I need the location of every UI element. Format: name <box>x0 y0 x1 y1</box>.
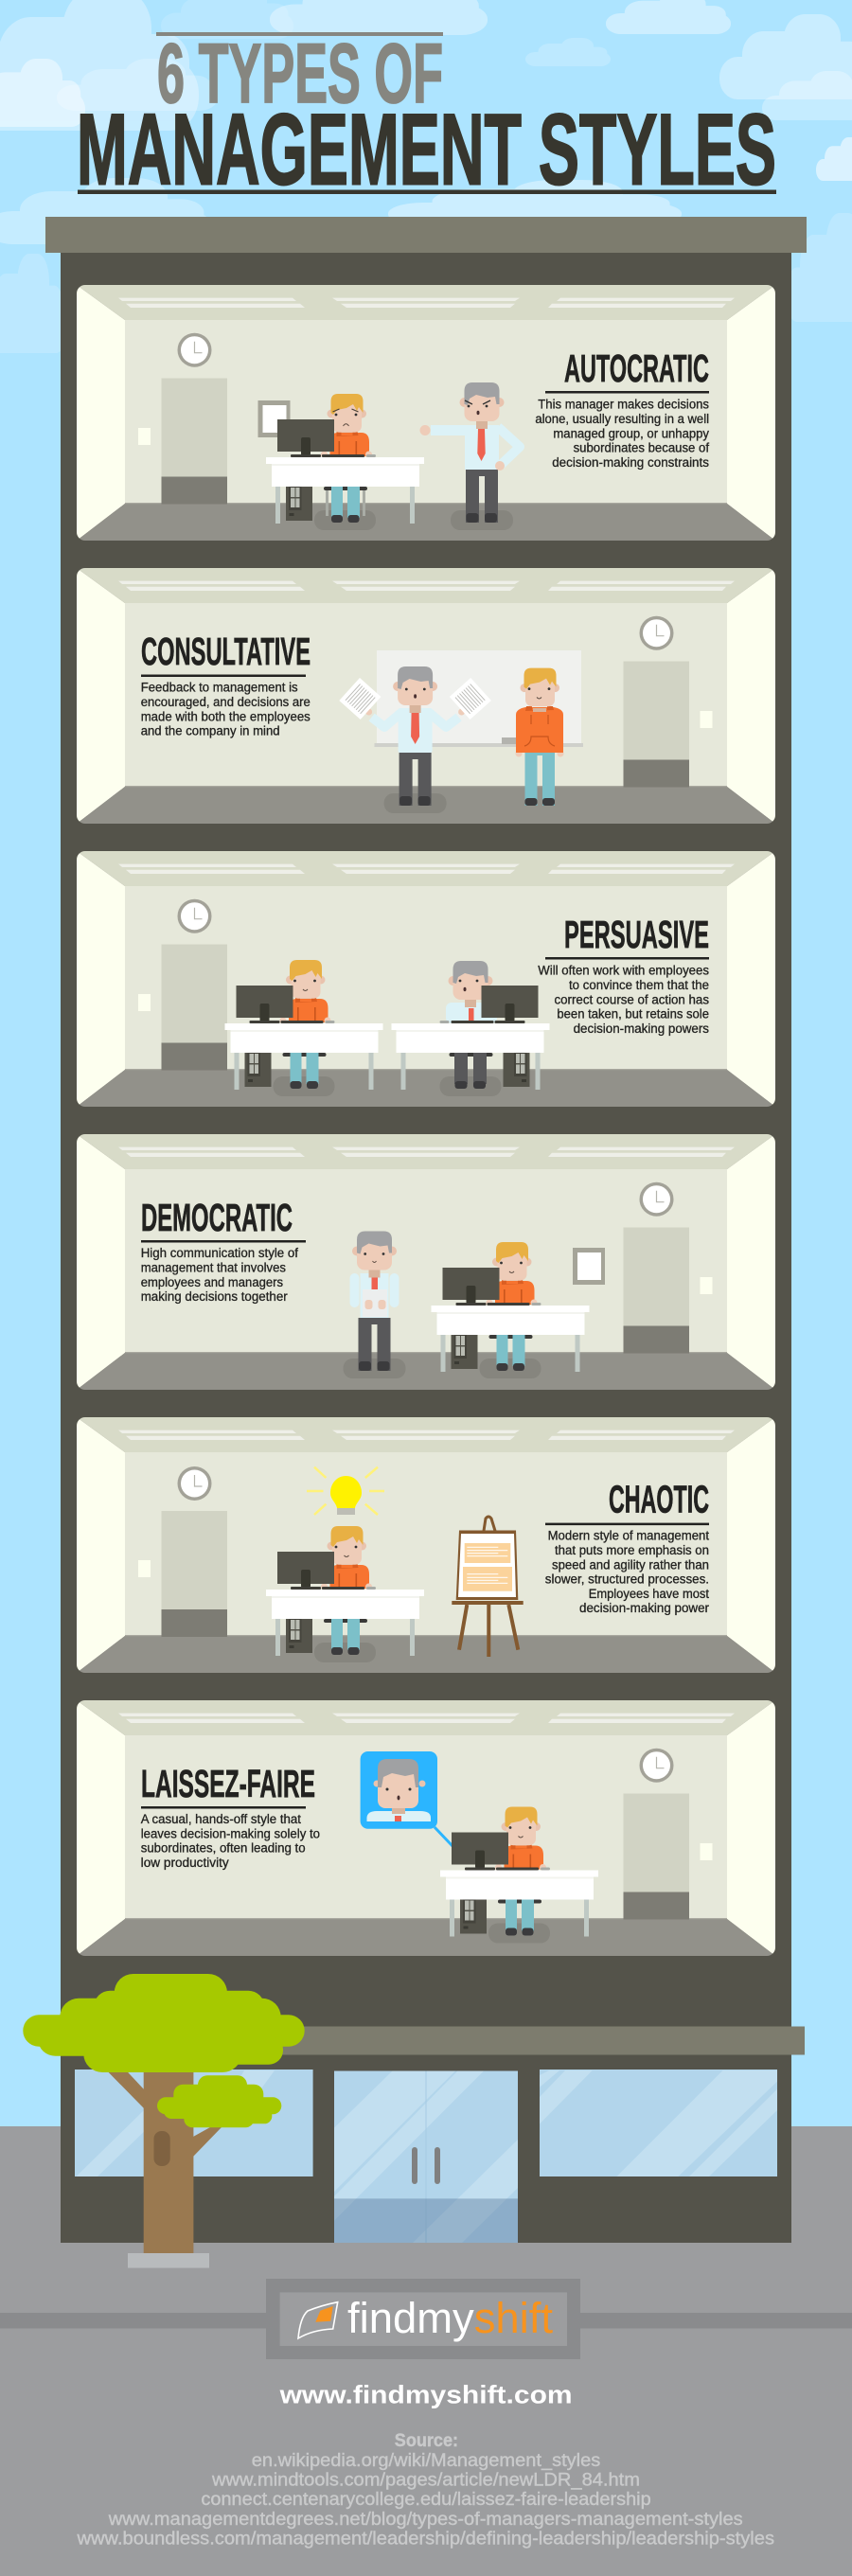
text: autocratic description: alone, usually resulting in a well <box>535 412 709 426</box>
clock <box>640 1749 674 1783</box>
clock <box>178 899 212 933</box>
whiteboard <box>375 650 583 747</box>
window: left <box>75 2070 313 2176</box>
heading: chaotic: CHAOTIC <box>609 1477 709 1520</box>
sources: www.managementdegrees.net/blog/types-of-managers-management-styles <box>108 2509 743 2530</box>
title <box>77 26 776 206</box>
road strip <box>0 2313 852 2329</box>
tree trunk <box>107 2064 222 2253</box>
panel: laissez-faire room <box>77 1700 775 1956</box>
sources: connect.centenarycollege.edu/laissez-faire-leadership <box>201 2489 651 2510</box>
logo box <box>266 2279 580 2359</box>
tree <box>23 1974 305 2268</box>
text: persuasive description: decision-making powers <box>574 1022 709 1036</box>
clock <box>640 616 674 650</box>
light switch <box>138 428 151 445</box>
heading: democratic: DEMOCRATIC <box>141 1196 293 1239</box>
panel: consultative room <box>77 568 775 824</box>
text: democratic description: High communication style of <box>141 1246 298 1260</box>
sources: en.wikipedia.org/wiki/Management_styles <box>252 2450 601 2471</box>
text: consultative description: Feedback to management is <box>141 681 298 695</box>
website url: www.findmyshift.com <box>278 2381 573 2409</box>
door handles <box>412 2147 417 2184</box>
manager at desk <box>392 961 549 1096</box>
clock <box>640 1182 674 1217</box>
text: persuasive description: correct course of action has <box>555 992 709 1006</box>
text: persuasive description: to convince them that the <box>569 978 709 992</box>
sources: Source: <box>395 2430 458 2451</box>
heading: laissez-faire: LAISSEZ-FAIRE <box>141 1762 315 1805</box>
heading: consultative: CONSULTATIVE <box>141 630 311 673</box>
panel: democratic room <box>77 1134 775 1390</box>
text: consultative description: and the company in mind <box>141 724 280 738</box>
text: consultative description <box>141 681 311 738</box>
text: chaotic description: Modern style of management <box>548 1529 709 1543</box>
employee at desk <box>432 1242 589 1378</box>
sources <box>76 2430 774 2549</box>
text: democratic description <box>141 1246 298 1304</box>
light switch <box>701 711 712 728</box>
panel: chaotic room <box>77 1417 775 1673</box>
heading: autocratic: AUTOCRATIC <box>564 346 709 390</box>
logo wordmark: findmyshift <box>347 2294 553 2342</box>
panel: autocratic room <box>77 285 775 541</box>
employee at desk <box>440 1806 598 1943</box>
paper left <box>339 678 381 720</box>
text: consultative description: made with both the employees <box>141 709 311 723</box>
sources: www.mindtools.com/pages/article/newLDR_84.htm <box>211 2469 640 2490</box>
employee standing <box>515 668 564 806</box>
title rule: bottom <box>78 189 776 194</box>
door <box>161 379 227 504</box>
heading rule: democratic <box>141 1240 306 1242</box>
text: chaotic description: Employees have most <box>589 1587 709 1601</box>
text: autocratic description: managed group, or unhappy <box>553 426 709 440</box>
manager pointing <box>420 382 520 530</box>
heading rule: laissez-faire <box>141 1806 306 1808</box>
window: right <box>540 2070 777 2176</box>
text: chaotic description: speed and agility rather than <box>552 1557 709 1572</box>
storefront awning <box>189 2026 805 2054</box>
text: democratic description: making decisions together <box>141 1289 288 1304</box>
door <box>161 945 227 1070</box>
heading rule: persuasive <box>545 957 709 960</box>
clock <box>178 333 212 367</box>
title rule: top <box>156 32 443 36</box>
speech bubble with manager portrait <box>361 1751 453 1846</box>
ground <box>0 2126 852 2576</box>
text: chaotic description: slower, structured processes. <box>545 1572 709 1587</box>
employee at desk <box>266 1526 424 1662</box>
text: laissez-faire description: subordinates, often leading to <box>141 1841 306 1856</box>
door <box>161 1511 227 1637</box>
text: laissez-faire description <box>141 1812 320 1870</box>
heading rule: autocratic <box>545 391 709 394</box>
heading rule: chaotic <box>545 1523 709 1525</box>
paper right <box>450 678 491 720</box>
text: chaotic description: decision-making power <box>579 1601 709 1615</box>
text: chaotic description: that puts more emphasis on <box>555 1543 709 1557</box>
text: persuasive description: Will often work with employees <box>538 964 709 978</box>
door <box>623 661 689 788</box>
heading: persuasive: PERSUASIVE <box>564 913 709 956</box>
text: autocratic description: This manager makes decisions <box>538 398 709 412</box>
text: persuasive description <box>538 964 709 1036</box>
light switch <box>138 994 151 1011</box>
text: laissez-faire description: leaves decision-making solely to <box>141 1826 320 1840</box>
text: autocratic description: decision-making constraints <box>552 455 709 470</box>
icon: light bulb <box>307 1467 384 1515</box>
panel: persuasive room <box>77 851 775 1107</box>
building roof <box>45 217 807 253</box>
manager with papers <box>339 666 491 813</box>
text: laissez-faire description: low productivity <box>141 1856 229 1870</box>
text: democratic description: management that involves <box>141 1261 286 1274</box>
title line 1: 6 TYPES OF <box>157 26 443 120</box>
door <box>623 1793 689 1920</box>
building wall <box>61 253 791 2243</box>
picture frame <box>257 400 290 437</box>
text: autocratic description: subordinates because of <box>574 441 709 455</box>
text: chaotic description <box>545 1529 709 1615</box>
sources: www.boundless.com/management/leadership/defining-leadership/leadership-styles <box>76 2528 774 2549</box>
light switch <box>701 1843 712 1860</box>
text: autocratic description <box>535 398 709 470</box>
text: laissez-faire description: A casual, hands-off style that <box>141 1812 301 1826</box>
employee at desk <box>225 960 382 1096</box>
picture frame <box>573 1248 605 1285</box>
tree base <box>128 2253 209 2268</box>
icon: logo page <box>298 2302 338 2338</box>
light switch <box>138 1560 151 1577</box>
text: democratic description: employees and managers <box>141 1275 283 1289</box>
clock <box>178 1466 212 1501</box>
clouds <box>0 0 852 353</box>
manager holding paper <box>343 1231 405 1378</box>
door <box>623 1227 689 1354</box>
easel with chart <box>452 1517 524 1657</box>
tree canopy <box>23 1974 305 2072</box>
heading rule: consultative <box>141 674 306 677</box>
light switch <box>701 1277 712 1294</box>
employee at desk, unhappy <box>266 394 424 530</box>
glass door <box>334 2071 518 2243</box>
small canopy <box>157 2075 281 2127</box>
text: persuasive description: been taken, but retains sole <box>557 1007 709 1022</box>
text: consultative description: encouraged, and decisions are <box>141 695 311 709</box>
tree knot <box>153 2131 170 2166</box>
